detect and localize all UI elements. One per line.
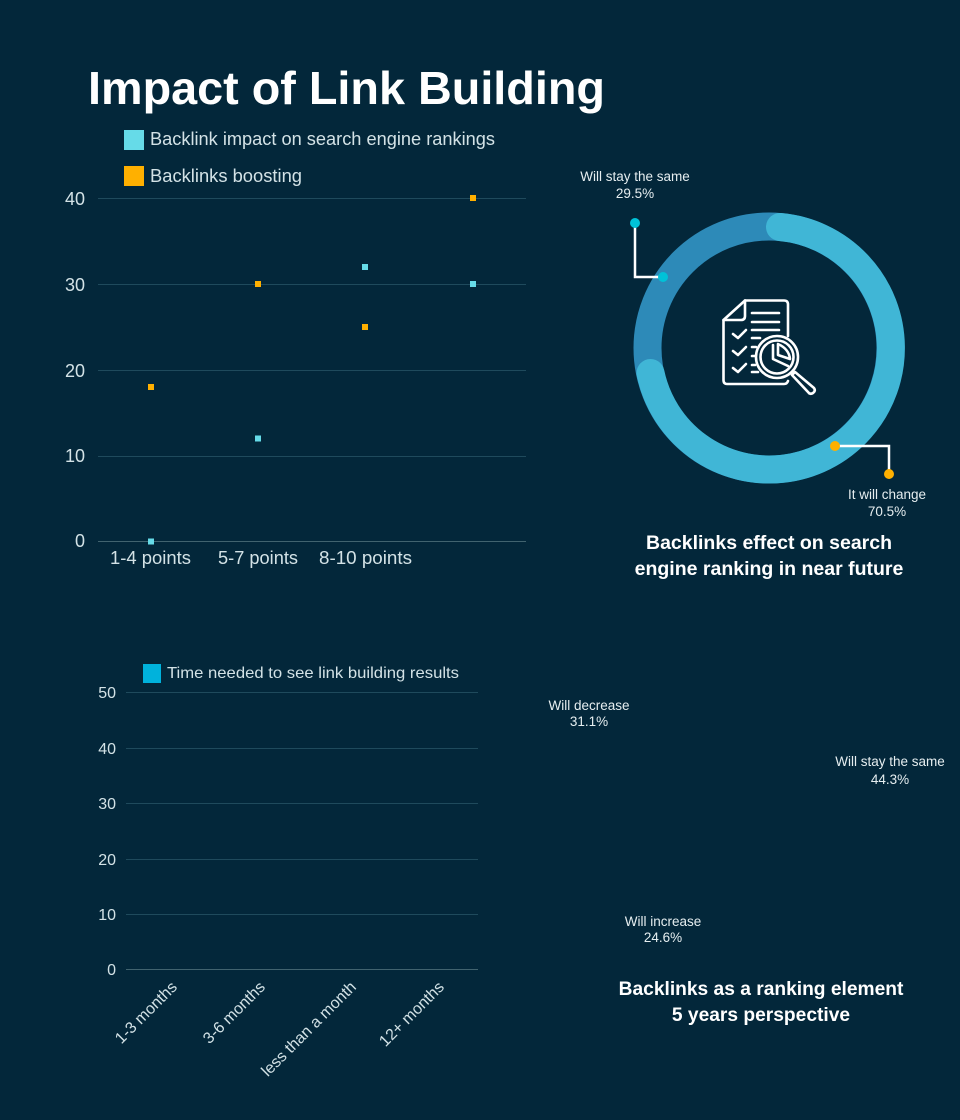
legend: first chart: Backlinks boosting [150, 166, 302, 186]
label: will stay the same: 44.3% [871, 772, 909, 787]
y axis labels: first chart: 20 [65, 361, 85, 381]
x axis labels: first chart: 1-4 points [110, 548, 191, 568]
y axis labels: first chart: 10 [65, 446, 85, 466]
x axis labels: second chart: 12+ months [376, 979, 448, 1050]
caption: five-year perspective: 5 years perspective [672, 1005, 850, 1026]
caption: five-year perspective: Backlinks as a ranking element [619, 979, 904, 1000]
y axis labels: second chart: 30 [98, 796, 116, 813]
ring segment: it will change [650, 227, 891, 470]
legend: first chart [124, 129, 495, 186]
legend: second chart: Time needed to see link building results [167, 665, 459, 682]
x axis labels: second chart: 1-3 months [112, 979, 181, 1047]
label: will decrease: Will decrease [548, 698, 630, 713]
x axis labels: first chart: 8-10 points [319, 548, 412, 568]
data points: backlinks boosting [148, 195, 476, 390]
y axis labels: first chart: 30 [65, 275, 85, 295]
donut chart: effect in near future [580, 169, 926, 580]
callout connector: will stay the same [630, 218, 668, 282]
title: Impact of Link Building [88, 62, 605, 114]
x axis labels: second chart: less than a month [259, 979, 360, 1080]
y axis labels: second chart [98, 685, 116, 979]
donut caption: engine ranking in near future [635, 558, 904, 580]
y axis labels: second chart: 50 [98, 685, 116, 702]
x axis labels: first chart [110, 548, 412, 568]
y axis labels: second chart: 10 [98, 907, 116, 924]
x axis labels: second chart [112, 979, 448, 1080]
callout connector: it will change [830, 441, 894, 479]
y axis labels: first chart: 40 [65, 189, 85, 209]
legend: first chart: Backlink impact on search engine rankings [150, 129, 495, 149]
x axis labels: second chart: 3-6 months [200, 979, 269, 1047]
callout label: will stay the same: 29.5% [616, 186, 654, 201]
callout label: it will change: It will change [848, 487, 926, 502]
y axis labels: first chart: 0 [75, 531, 85, 551]
label: will stay the same: Will stay the same [835, 754, 945, 769]
icon: report with magnifier [724, 300, 815, 394]
label: will increase: 24.6% [644, 930, 682, 945]
ring segment: will stay the same [648, 226, 890, 470]
callout label: will stay the same: Will stay the same [580, 169, 690, 184]
label: will decrease: 31.1% [570, 714, 608, 729]
chart: backlink impact scatter [65, 129, 526, 568]
label: will increase: Will increase [625, 914, 701, 929]
callout label: it will change: 70.5% [868, 504, 906, 519]
y axis labels: first chart [65, 189, 85, 551]
y axis labels: second chart: 40 [98, 741, 116, 758]
y axis labels: second chart: 20 [98, 852, 116, 869]
labels: five-year perspective [548, 698, 945, 1026]
data points: backlink impact [148, 264, 476, 544]
y axis labels: second chart: 0 [107, 962, 116, 979]
donut caption: Backlinks effect on search [646, 532, 892, 554]
chart: time needed to see results [98, 664, 478, 1080]
x axis labels: first chart: 5-7 points [218, 548, 298, 568]
